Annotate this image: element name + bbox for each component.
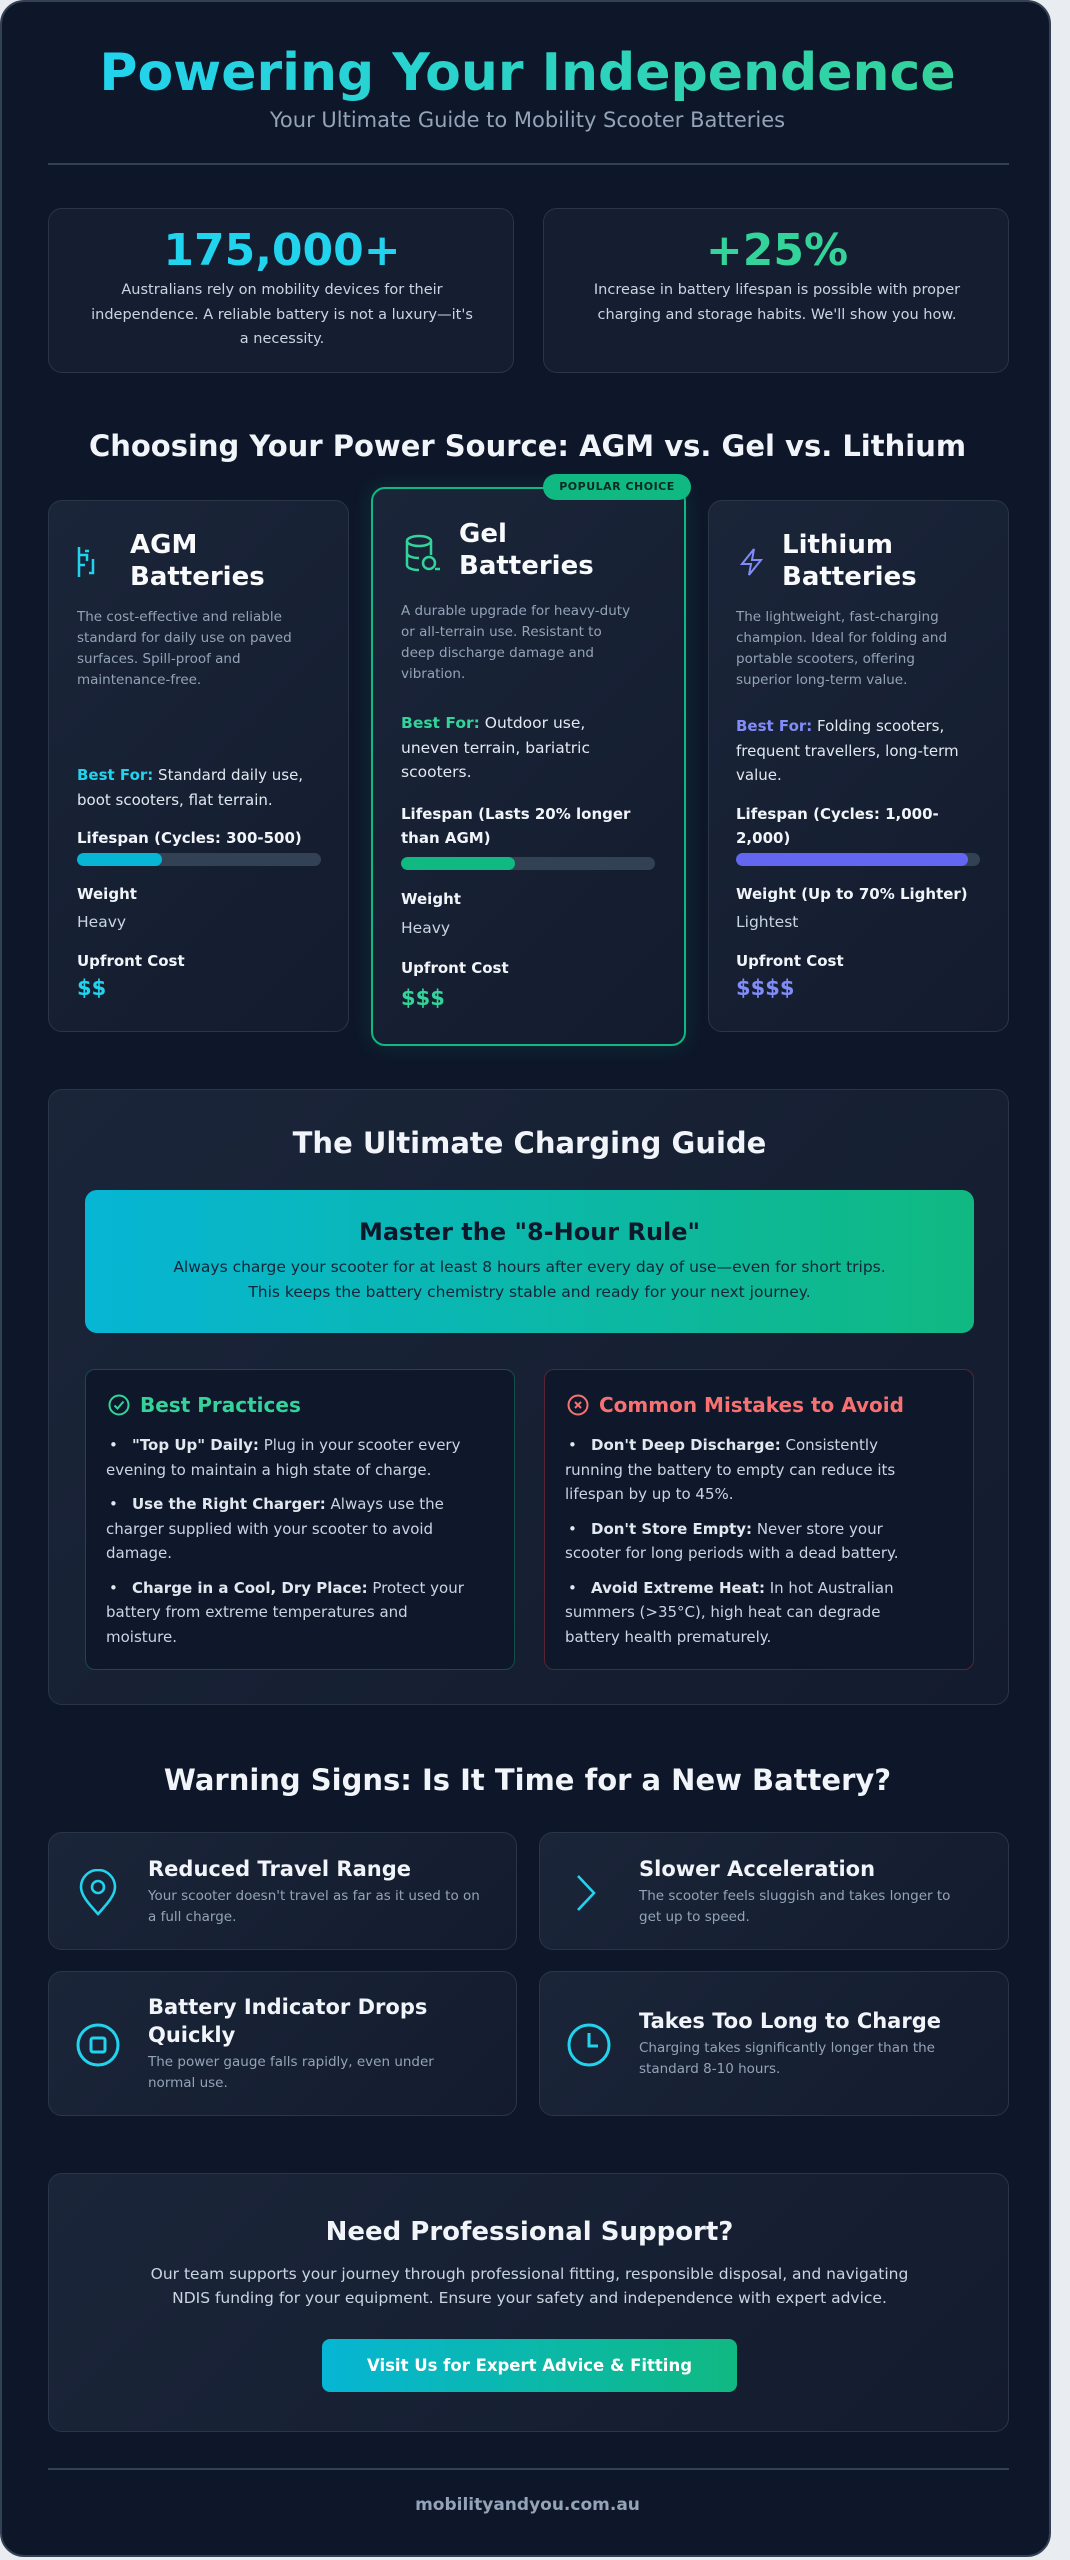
AGM best for: Best For: Standard daily use, [77,766,303,784]
icon: battery square [76,2024,120,2066]
panel: common mistakes [544,1369,974,1670]
callout: 8-hour rule [85,1190,974,1333]
panel: Gel: $$$ [401,986,445,1010]
AGM desc: standard for daily use on paved [77,630,292,646]
icon: AGM [78,547,94,577]
AGM best for: boot scooters, flat terrain. [77,790,273,808]
mistakes list [565,1436,899,1646]
icon: clock [568,2024,610,2066]
stat text: charging and storage habits. We'll show you how. [598,306,956,322]
stat card: 175,000+ [48,208,514,373]
warning card: slower acceleration: Slower Acceleration [639,1857,875,1881]
panel: Gel: Heavy [401,919,450,937]
AGM lifespan: Lifespan (Cycles: 300-500) [77,829,302,847]
callout: 8-hour rule: This keeps the battery chemistry stable and ready for your next journey. [248,1283,811,1301]
warning card: reduced range: a full charge. [148,1909,236,1925]
AGM desc: The cost-effective and reliable [77,609,282,625]
AGM weight: Weight [77,885,137,903]
mistakes list: scooter for long periods with a dead battery. [565,1544,899,1562]
panel: Lithium [708,500,1009,1032]
panel: professional support [48,2173,1009,2432]
Gel cost: Upfront Cost [401,959,509,977]
warning card: takes long to charge: standard 8-10 hours. [639,2061,780,2077]
icon: Gel [406,534,440,572]
mistakes list: Don't Store Empty: Never store your [591,1520,883,1538]
AGM desc [76,609,292,688]
best practices list: Use the Right Charger: Always use the [132,1495,444,1513]
Gel best for: uneven terrain, bariatric [401,738,590,756]
warning card: reduced range [48,1832,517,1950]
Lithium title [782,530,917,592]
warning card: reduced range: Reduced Travel Range [148,1857,411,1881]
Gel weight: Weight [401,890,461,908]
Lithium desc: champion. Ideal for folding and [736,630,947,646]
panel: AGM [48,500,349,1032]
warning card: slower acceleration [539,1832,1009,1950]
Lithium best for: Best For: Folding scooters, [736,717,944,735]
warning card: takes long to charge [539,1971,1009,2116]
Gel desc: vibration. [401,666,465,682]
footer: mobilityandyou.com.au [415,2495,640,2515]
stat number: +25% [706,225,848,276]
panel: charging guide [48,1089,1009,1705]
charging heading: The Ultimate Charging Guide [293,1126,766,1160]
icon: pin [80,1869,116,1916]
support text [151,2265,908,2307]
Lithium lifespan: Lifespan (Cycles: 1,000-2,000) [736,805,939,847]
warning card: indicator drops: The power gauge falls rapidly, even under [148,2054,434,2070]
stat number: 175,000+ [163,225,401,276]
warning card: indicator drops: Battery Indicator Drops Quickly [148,1995,427,2047]
mistakes list: running the battery to empty can reduce its [565,1460,895,1478]
support text: Our team supports your journey through professional fitting, responsible disposal, and navigating [151,2265,908,2283]
callout: 8-hour rule: Master the "8-Hour Rule" [359,1218,700,1246]
panel: AGM: $$ [77,976,106,1000]
warning card: indicator drops [48,1971,517,2116]
Gel desc: deep discharge damage and [401,645,594,661]
Gel title [459,519,594,581]
warning card: indicator drops: normal use. [148,2075,228,2091]
mistakes list: Don't Deep Discharge: Consistently [591,1436,878,1454]
warning card: takes long to charge: Takes Too Long to Charge [639,2009,941,2033]
button: visit us: Visit Us for Expert Advice & Fitting [367,2356,692,2375]
callout: 8-hour rule: Always charge your scooter for at least 8 hours after every day of use—even for short trips. [173,1258,886,1276]
best practices list: battery from extreme temperatures and [106,1603,408,1621]
Gel desc: A durable upgrade for heavy-duty [401,603,630,619]
best practices list: evening to maintain a high state of charge. [106,1460,431,1478]
button: visit us [322,2339,737,2392]
Lithium best for [736,717,959,784]
best practices list: "Top Up" Daily: Plug in your scooter every [132,1436,460,1454]
panel: best practices [85,1369,515,1670]
Lithium cost: Upfront Cost [736,952,844,970]
panel: AGM: Heavy [77,913,126,931]
stat text: Australians rely on mobility devices for their [121,282,443,298]
best practices list [106,1436,464,1646]
AGM cost: Upfront Cost [77,952,185,970]
Lithium desc: The lightweight, fast-charging [736,609,939,625]
Lithium weight: Weight (Up to 70% Lighter) [736,885,968,903]
panel: Lithium: Lightest [736,913,798,931]
best practices list: charger supplied with your scooter to avoid [106,1520,433,1538]
stat text: independence. A reliable battery is not a luxury—it's [91,306,473,322]
AGM title [130,530,265,592]
Lithium desc: portable scooters, offering [736,651,915,667]
mistakes list: summers (>35°C), high heat can degrade [565,1603,881,1621]
warning card: takes long to charge: Charging takes significantly longer than the [639,2040,935,2056]
AGM desc: maintenance-free. [77,672,201,688]
Gel best for: scooters. [401,763,472,781]
heading: warning signs: Warning Signs: Is It Time for a New Battery? [164,1763,891,1797]
Gel best for: Best For: Outdoor use, [401,714,585,732]
icon: chevron [577,1875,596,1911]
badge: popular choice: POPULAR CHOICE [559,480,675,493]
Gel title: Batteries [459,551,594,581]
support text: NDIS funding for your equipment. Ensure your safety and independence with expert advice. [172,2289,887,2307]
stat text [91,282,473,347]
title: Powering Your Independence [99,43,956,103]
best practices list: Charge in a Cool, Dry Place: Protect your [132,1578,464,1596]
icon: lightning [740,548,763,576]
warning card: slower acceleration: The scooter feels sluggish and takes longer to [639,1888,950,1904]
panel: Gel [371,487,686,1046]
stat text: Increase in battery lifespan is possible with proper [594,282,960,298]
stat text [594,282,960,322]
AGM desc: surfaces. Spill-proof and [77,651,241,667]
mistakes heading: Common Mistakes to Avoid [599,1393,904,1417]
best practices heading: Best Practices [140,1393,301,1417]
stat text: a necessity. [240,331,324,347]
mistakes list: battery health prematurely. [565,1628,771,1646]
best practices list: moisture. [106,1628,177,1646]
best practices list: damage. [106,1544,172,1562]
AGM title: Batteries [130,562,265,592]
Lithium title: Lithium [782,530,893,560]
Gel title: Gel [459,519,507,549]
Gel best for [401,714,590,781]
heading: choosing power source: Choosing Your Power Source: AGM vs. Gel vs. Lithium [89,429,966,463]
badge: popular choice [543,474,691,500]
Lithium desc: superior long-term value. [736,672,907,688]
Gel lifespan: Lifespan (Lasts 20% longer than AGM) [401,805,630,847]
mistakes list: lifespan by up to 45%. [565,1485,734,1503]
Lithium best for: value. [736,766,782,784]
AGM best for [77,766,303,808]
AGM title: AGM [130,530,197,560]
Lithium title: Batteries [782,562,917,592]
subtitle: Your Ultimate Guide to Mobility Scooter Batteries [270,108,785,132]
Gel desc: or all-terrain use. Resistant to [401,624,602,640]
support heading: Need Professional Support? [326,2217,733,2247]
Lithium desc [736,609,947,688]
stat card: +25% [543,208,1009,373]
Gel desc [401,603,630,682]
panel: Lithium: $$$$ [736,976,794,1000]
mistakes list: Avoid Extreme Heat: In hot Australian [591,1578,894,1596]
warning card: slower acceleration: get up to speed. [639,1909,750,1925]
Lithium best for: frequent travellers, long-term [736,742,959,760]
warning card: reduced range: Your scooter doesn't travel as far as it used to on [148,1888,480,1904]
